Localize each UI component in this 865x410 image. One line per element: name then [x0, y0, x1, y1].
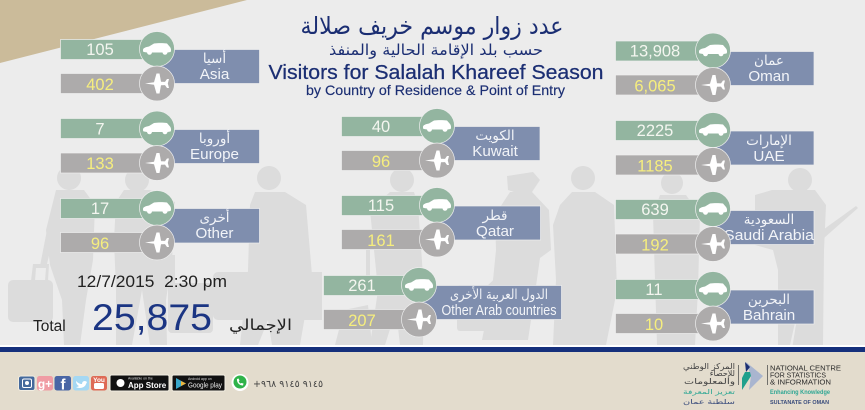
tan corner triangle: [0, 0, 247, 63]
date and time: 12/7/2015 2:30 pm: [77, 273, 227, 291]
panel: Qatar: Qatar: [476, 223, 514, 240]
logo English name: Enhancing Knowledge: [770, 390, 831, 396]
title block: [268, 12, 604, 98]
silhouettes of travellers: [8, 166, 858, 349]
panel: UAE: الإمارات: [746, 133, 792, 149]
panel: Qatar: 115: [368, 197, 394, 215]
total: 25,875: [92, 297, 212, 338]
panel: Kuwait: Kuwait: [472, 143, 519, 160]
panel: Other: 96: [91, 235, 109, 253]
panel: Other: أخرى: [199, 208, 230, 226]
panel: Qatar: قطر: [482, 208, 507, 224]
panel: Asia: [60, 32, 260, 101]
google play badge: Google play: [188, 380, 222, 390]
icon: youtube: You: [93, 377, 105, 384]
panel: Saudi Arabia: السعودية: [744, 212, 794, 228]
google play badge: [172, 375, 225, 391]
panel: Kuwait: 40: [372, 118, 390, 136]
logo Arabic name: والمعلومات: [684, 377, 735, 386]
panel: UAE: 2225: [637, 122, 673, 140]
panel: Asia: أسيا: [203, 49, 226, 67]
panel: Saudi Arabia: 192: [641, 236, 669, 254]
panel: Other: 17: [91, 200, 109, 218]
logo English name: [770, 364, 841, 406]
icon: google plus: g+: [38, 377, 52, 391]
panel: Qatar: [342, 188, 540, 257]
icon: instagram: [18, 376, 35, 390]
Arabic title: عدد زوار موسم خريف صلالة: [300, 12, 564, 40]
panel: Asia: 105: [86, 41, 114, 59]
panel: Bahrain: [616, 272, 814, 341]
panel: Asia: Asia: [200, 66, 230, 83]
panel: Asia: 402: [86, 76, 114, 94]
panel: Europe: 133: [86, 155, 114, 173]
icon: twitter: [73, 376, 89, 390]
panel: Bahrain: Bahrain: [743, 307, 795, 324]
total: الإجمالي: [229, 316, 292, 335]
panel: Other: Other: [196, 225, 233, 242]
panel: Other Arab countries: 261: [348, 277, 376, 295]
logo Arabic name: تعزيز المعرفة: [683, 389, 735, 396]
panel: Other Arab countries: Other Arab countries: [442, 302, 557, 319]
logo Arabic name: سلطنة عمان: [683, 399, 735, 406]
social media icons: [18, 376, 107, 394]
panel: Bahrain: 11: [645, 281, 663, 299]
panel: Oman: عمان: [754, 53, 784, 69]
panel: Qatar: 161: [367, 232, 395, 250]
panel: UAE: UAE: [753, 148, 785, 165]
panel: UAE: [616, 112, 814, 182]
app store badge: [110, 375, 169, 391]
panel: Oman: 6,065: [634, 78, 676, 96]
panel: Oman: 13,908: [630, 42, 680, 60]
phone number: +٩٦٨ ٩١٤٥ ٩١٤٥: [253, 379, 323, 390]
logo mark: [742, 362, 763, 390]
panel: Saudi Arabia: 639: [641, 201, 669, 219]
logo English name: & INFORMATION: [770, 378, 831, 386]
panel: Kuwait: 96: [372, 153, 390, 171]
panel: Other Arab countries: [324, 268, 562, 337]
panel: Europe: أوروبا: [199, 129, 230, 147]
logo English name: NATIONAL CENTRE: [770, 364, 841, 372]
total: Total: [33, 318, 66, 335]
panel: Kuwait: الكويت: [475, 128, 515, 144]
icon: facebook: f: [60, 376, 66, 394]
panel: Oman: Oman: [748, 68, 790, 85]
total: [33, 297, 292, 338]
Arabic subtitle: حسب بلد الإقامة الحالية والمنفذ: [329, 41, 543, 59]
panel: Other Arab countries: الدول العربية الأخرى: [450, 286, 548, 303]
panel: Saudi Arabia: Saudi Arabia: [724, 227, 815, 244]
panel: Oman: [616, 33, 814, 102]
google play badge: Android app on: [188, 377, 212, 381]
footer band: [0, 345, 865, 410]
logo English name: SULTANATE OF OMAN: [770, 400, 829, 406]
panel: Europe: [60, 111, 260, 180]
English subtitle: by Country of Residence & Point of Entry: [306, 82, 565, 98]
logo English name: FOR STATISTICS: [770, 370, 826, 380]
panel: Europe: 7: [95, 120, 105, 138]
panel: Other: [60, 190, 260, 260]
panel: Bahrain: 10: [645, 316, 663, 334]
panel: Other Arab countries: 207: [348, 312, 376, 330]
app store badge: App Store: [128, 381, 167, 390]
panel: Bahrain: البحرين: [748, 292, 790, 308]
panel: UAE: 1185: [637, 158, 673, 176]
NCSI logo: [683, 362, 841, 406]
panel: Europe: Europe: [190, 146, 239, 163]
app store badge: Available on the: [128, 376, 153, 380]
icon: whatsapp: [232, 374, 248, 391]
panel: Saudi Arabia: [616, 192, 815, 262]
English title: Visitors for Salalah Khareef Season: [268, 62, 604, 84]
logo Arabic name: [683, 362, 735, 406]
panel: Kuwait: [342, 108, 540, 178]
logo Arabic name: للإحصاء: [710, 369, 735, 379]
logo Arabic name: المركز الوطني: [683, 362, 735, 371]
